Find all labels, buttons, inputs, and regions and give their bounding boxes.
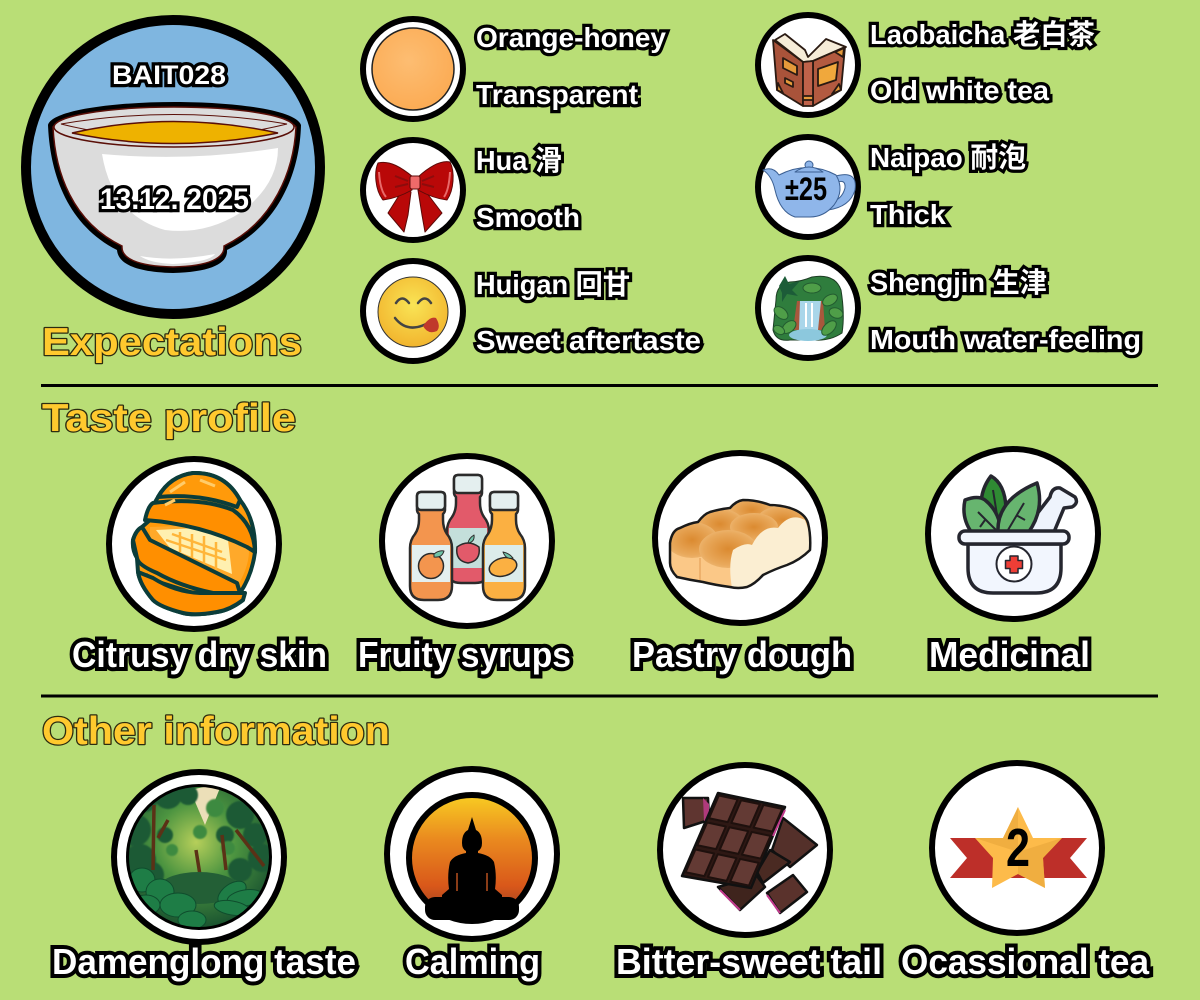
icon: honey colour disc [372, 28, 454, 110]
icon: tea bowl [48, 102, 301, 273]
icon: milk bread loaf [668, 498, 812, 590]
item: bitter-sweet tail [616, 765, 882, 982]
label: shengjin: Shengjin 生津 [870, 267, 1047, 298]
icon: mortar with herbs [959, 476, 1076, 593]
label: bitter-sweet tail: Bitter-sweet tail [616, 941, 882, 982]
icon: star with ribbon [950, 807, 1087, 888]
item: citrusy dry skin [72, 459, 327, 675]
item: calming [387, 769, 557, 982]
heading: taste profile: Taste profile [42, 397, 296, 440]
item: occasional tea [901, 763, 1150, 982]
icon: red bow [376, 162, 453, 232]
item: naipao thick [758, 137, 1026, 237]
item: orange-honey transparent [363, 19, 666, 119]
heading: other information: Other information [42, 710, 390, 753]
label: citrusy dry skin: Citrusy dry skin [72, 634, 327, 675]
label: clarity: Transparent [476, 79, 638, 110]
item: hua smooth [363, 140, 580, 240]
label: smooth: Smooth [476, 202, 580, 233]
panel: tea bowl badge [26, 20, 320, 314]
heading: expectations: Expectations [42, 321, 302, 364]
icon: syrup bottles [410, 475, 525, 600]
item: medicinal [928, 449, 1098, 675]
label: sweet aftertaste: Sweet aftertaste [476, 325, 701, 356]
icon: old book [773, 34, 846, 106]
label: calming: Calming [405, 941, 540, 982]
icon: smiling face [378, 277, 448, 347]
item: shengjin mouth water-feeling [758, 258, 1141, 358]
label: colour: Orange-honey [476, 22, 666, 53]
label: thick: Thick [870, 199, 946, 230]
label: ocassional tea: Ocassional tea [901, 941, 1150, 982]
icon: jungle waterfall [772, 276, 844, 341]
label: fruity syrups: Fruity syrups [358, 634, 571, 675]
label: hua: Hua 滑 [476, 145, 562, 176]
item: fruity syrups [358, 456, 571, 675]
item: damenglong taste [52, 772, 356, 982]
label: medicinal: Medicinal [929, 634, 1090, 675]
label: pastry dough: Pastry dough [632, 634, 852, 675]
tasting date: 13.12. 2025 [100, 183, 249, 216]
star rating number: 2 [1006, 818, 1030, 878]
label: huigan: Huigan 回甘 [476, 269, 630, 300]
icon: chocolate pieces [682, 793, 817, 913]
icon: blue teapot [763, 161, 855, 217]
label: laobaicha: Laobaicha 老白茶 [870, 19, 1095, 50]
item: huigan sweet aftertaste [363, 261, 701, 361]
label: damenglong taste: Damenglong taste [52, 941, 356, 982]
label: mouth water-feeling: Mouth water-feeling [870, 324, 1141, 355]
label: naipao: Naipao 耐泡 [870, 142, 1026, 173]
teapot infusion count: ±25 [785, 171, 827, 207]
label: old white tea: Old white tea [870, 75, 1049, 106]
icon: meditating buddha at sunset [409, 795, 535, 921]
item: pastry dough [632, 453, 852, 675]
icon: peeled orange [133, 473, 255, 614]
icon: forest scene [129, 787, 269, 927]
tea code: BAIT028 [112, 60, 226, 90]
item: laobaicha old white tea [758, 15, 1095, 115]
